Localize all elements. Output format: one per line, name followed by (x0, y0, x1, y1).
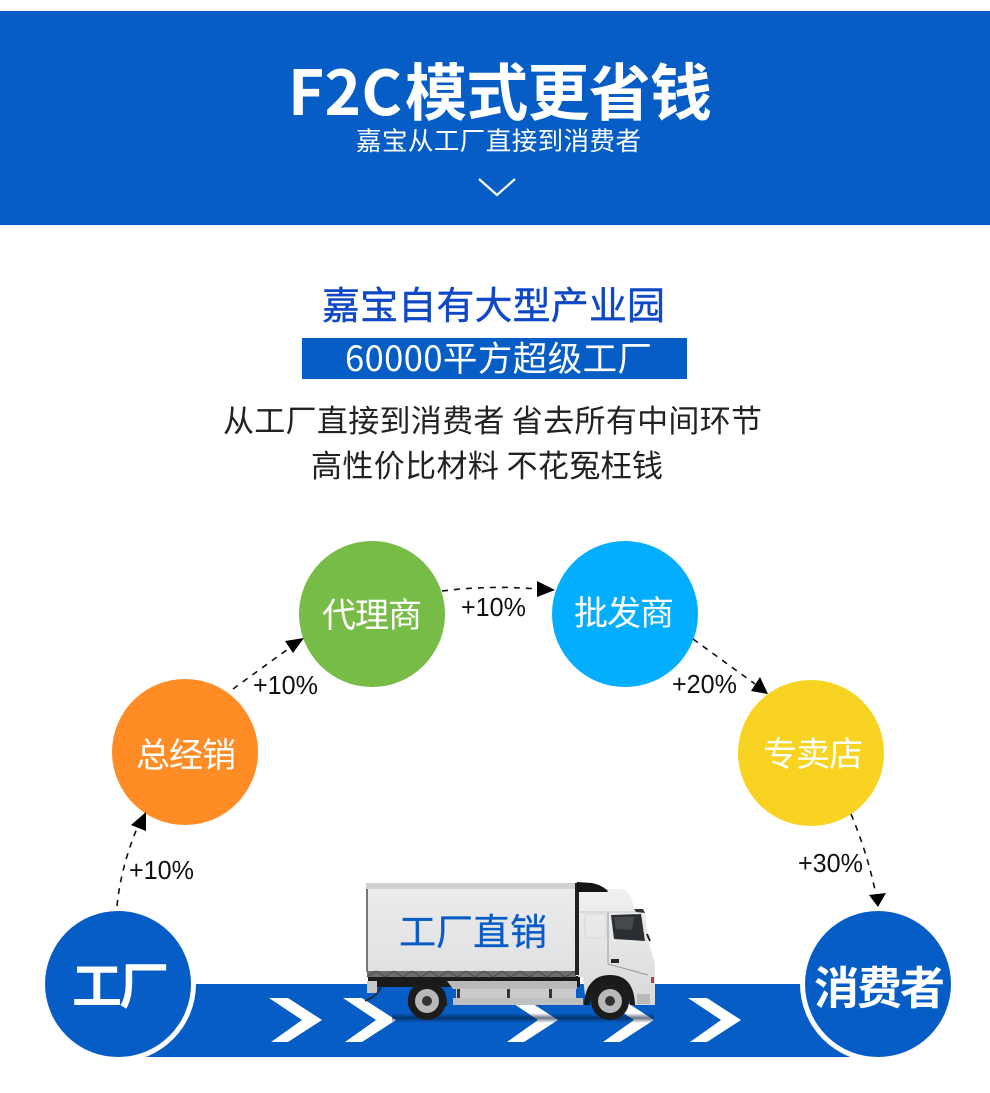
circle: factory (40, 906, 196, 1062)
ground shadow (392, 1013, 654, 1023)
arrow: distributor to agent (233, 638, 304, 689)
circle: wholesaler: 批发商 (574, 586, 674, 635)
headlight (637, 994, 650, 1004)
cab (577, 889, 655, 1005)
heading: 嘉宝自有大型产业园 (322, 275, 665, 330)
label: +10%: +10% (129, 857, 194, 885)
circle: wholesaler (552, 541, 698, 687)
banner: 60000 square metres: 60000平方超级工厂 (345, 331, 652, 381)
circle: agent (299, 541, 445, 687)
header band (0, 11, 990, 225)
cab window (611, 914, 645, 941)
chassis (368, 976, 580, 987)
icon: road chevrons (269, 998, 741, 1042)
cab spoiler (577, 882, 608, 892)
arrow: agent to wholesaler (442, 581, 555, 597)
subtitle: 嘉宝从工厂直接到消费者 (356, 121, 641, 158)
arrow: wholesaler to store (693, 639, 768, 694)
arrow: factory to distributor (117, 812, 146, 906)
title: 模式更省钱 (405, 43, 712, 133)
circle: agent: 代理商 (322, 588, 422, 637)
title: F2C (288, 43, 402, 133)
text block: description: 从工厂直接到消费者 省去所有中间环节 (223, 396, 762, 441)
label: +20%: +20% (672, 671, 737, 699)
cargo box lettering: 工厂直销 (399, 902, 547, 956)
label: +30%: +30% (798, 850, 863, 878)
circle: factory: 工厂 (72, 947, 169, 1019)
circle: consumer (800, 906, 956, 1062)
label: +10%: +10% (461, 594, 526, 622)
text block: description (223, 396, 762, 486)
circle: general distributor: 总经销 (136, 728, 236, 777)
circle: specialty store (738, 680, 884, 826)
truck (365, 882, 655, 1023)
cab door line (608, 912, 648, 975)
front wheel (584, 975, 635, 1020)
icon: down chevron (479, 179, 515, 195)
text block: description: 高性价比材料 不花冤枉钱 (311, 441, 663, 486)
arrow: store to consumer (851, 814, 886, 907)
side skirts (447, 981, 577, 989)
rear wheel (408, 982, 447, 1020)
circle: general distributor (112, 679, 258, 825)
circle: specialty store: 专卖店 (763, 727, 863, 776)
label: +10%: +10% (253, 672, 318, 700)
road (118, 984, 878, 1057)
cargo box (366, 885, 576, 972)
circle: consumer: 消费者 (814, 952, 945, 1017)
